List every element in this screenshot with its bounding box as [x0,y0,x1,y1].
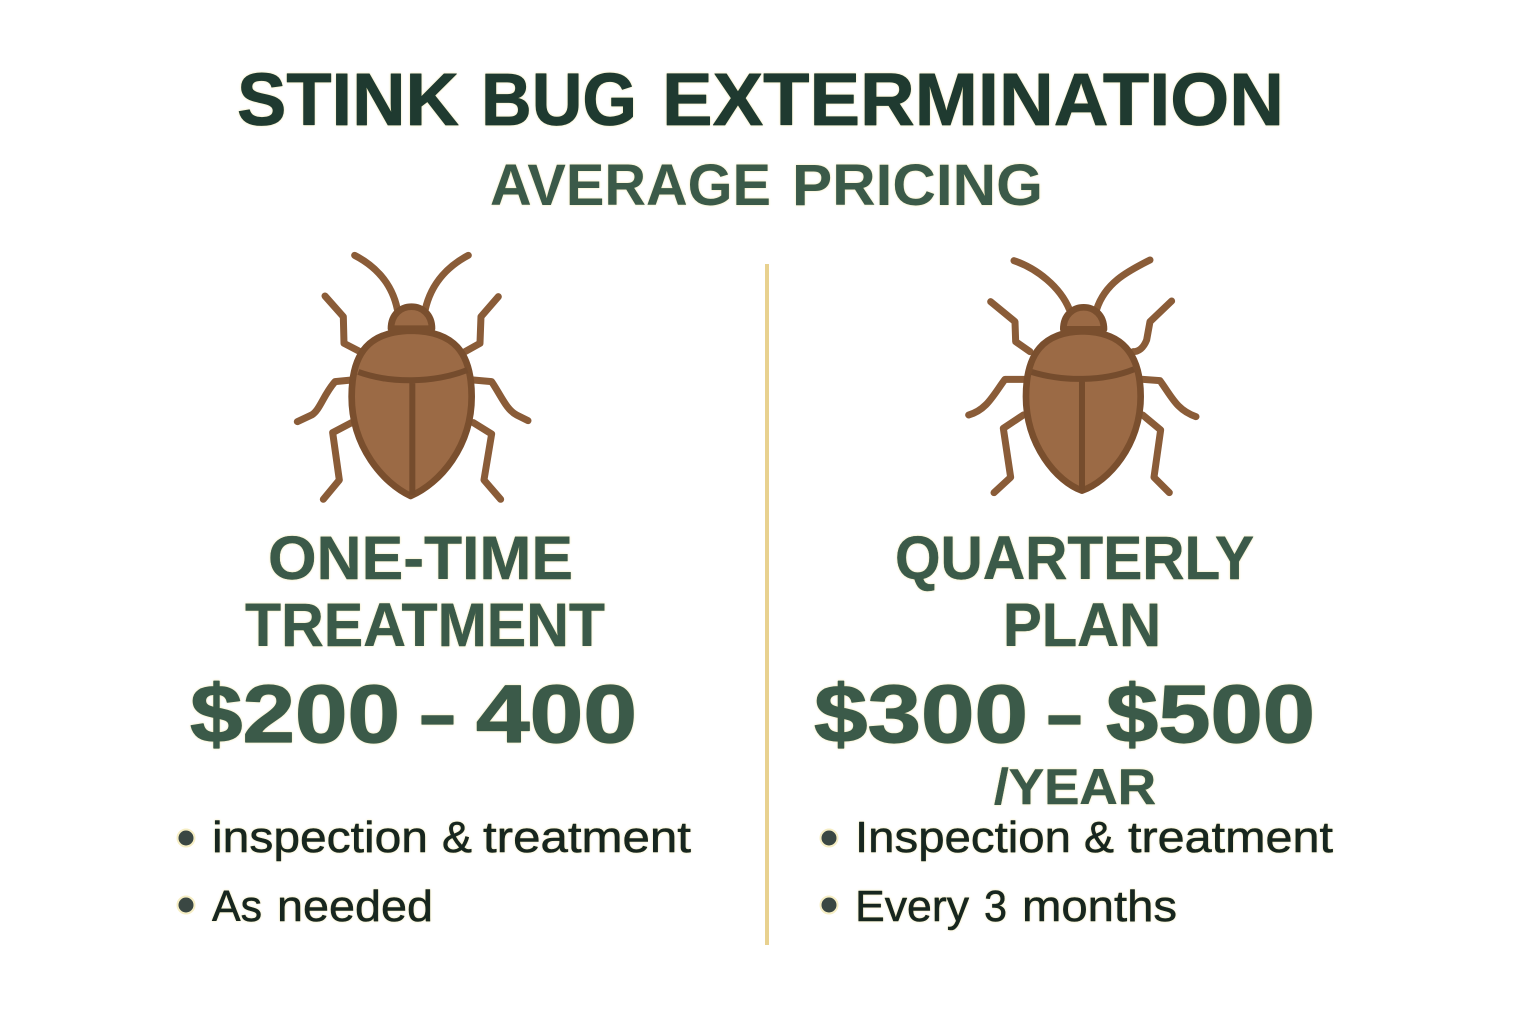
subtitle: PRICING [792,153,1043,218]
panel: quarterly plan [814,524,1333,931]
heading: one-time treatment [245,524,605,659]
icon: stink bug right [969,260,1196,493]
bullet list: one-time: inspection [212,813,428,862]
price: one-time: $200 [190,669,400,760]
subtitle [490,153,1043,218]
bullet list: quarterly: Inspection [855,813,1071,862]
price: quarterly [814,669,1315,760]
bullet list: quarterly: 3 [984,882,1007,931]
heading: one-time treatment: TREATMENT [245,591,605,659]
bullet list: one-time: & [442,813,472,862]
bullet list: quarterly: months [1022,882,1177,931]
bullet list: quarterly: & [1084,813,1114,862]
panel: one-time treatment [178,524,691,931]
bullet list: quarterly: Every [855,882,969,931]
bullet list: quarterly: treatment [1128,813,1333,862]
title: EXTERMINATION [662,58,1284,141]
price: one-time [190,669,637,760]
heading: quarterly plan: QUARTERLY [895,524,1254,592]
center divider [765,264,769,945]
price: quarterly: $300 [814,669,1028,760]
heading: quarterly plan: PLAN [1003,591,1161,659]
heading: quarterly plan [895,524,1254,659]
price unit: per year: /YEAR [994,759,1156,815]
icon: stink bug left [297,255,528,499]
bullet list: quarterly [820,813,1333,931]
price: quarterly: $500 [1106,669,1315,760]
title [237,58,1284,141]
bullet list: one-time: treatment [483,813,691,862]
bullet list: one-time [178,813,691,931]
title: BUG [481,58,637,141]
price: quarterly: – [1047,669,1082,760]
heading: one-time treatment: ONE-TIME [268,524,573,592]
bullet list: one-time: As [212,882,262,931]
title: STINK [237,58,459,141]
price: one-time: 400 [476,669,637,760]
subtitle: AVERAGE [490,153,771,218]
bullet list: one-time: needed [277,882,433,931]
price: one-time: – [420,669,455,760]
